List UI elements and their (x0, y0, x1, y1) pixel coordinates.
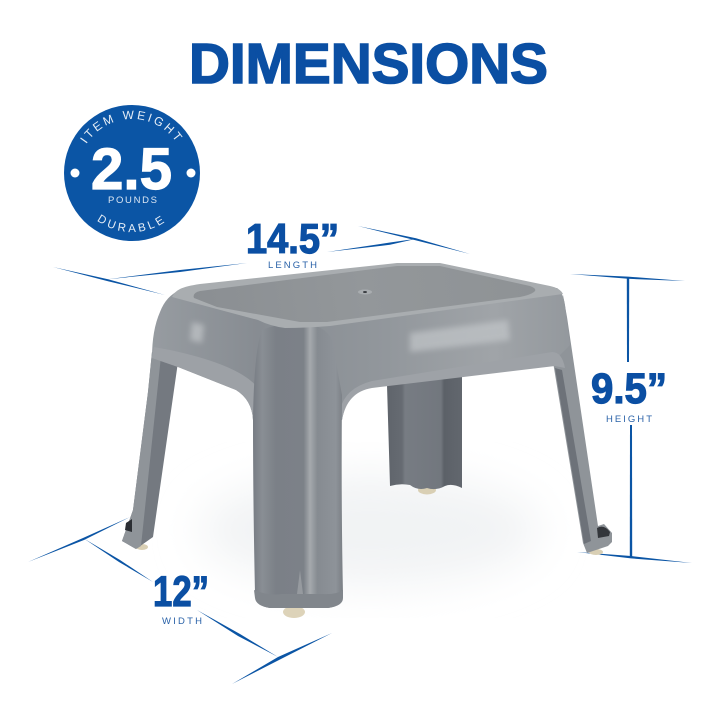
back leg (387, 375, 462, 494)
height label: HEIGHT (606, 414, 652, 425)
seat rim (172, 263, 563, 328)
badge: item weight (64, 105, 200, 241)
front leg notch (297, 570, 303, 594)
title: DIMENSIONS (189, 32, 548, 96)
step stool (122, 263, 612, 618)
apron lower lip (152, 347, 258, 420)
badge dots (70, 168, 196, 178)
height value: 9.5” (591, 365, 667, 413)
front foot (283, 606, 305, 618)
seat apron (152, 288, 570, 420)
badge value: 2.5 (91, 137, 172, 202)
width label: WIDTH (162, 616, 202, 627)
badge unit: POUNDS (108, 195, 157, 206)
apron lower lip right (340, 352, 565, 420)
length label: LENGTH (268, 260, 317, 271)
front foot rim (254, 590, 343, 608)
height dimension lines (570, 274, 692, 563)
badge label: durable: DURABLE (98, 214, 164, 232)
apron highlights (190, 320, 510, 352)
seat centre hole (358, 290, 372, 294)
front leg (253, 324, 343, 608)
badge label: item weight: ITEM WEIGHT (80, 110, 183, 144)
width dimension lines (28, 517, 332, 684)
right leg (553, 295, 612, 555)
seat mat (194, 266, 535, 322)
seat top (172, 263, 563, 328)
length dimension lines (53, 226, 470, 295)
width value: 12” (153, 568, 209, 616)
floor shadow (200, 475, 540, 585)
left leg (122, 352, 178, 550)
length value: 14.5” (246, 215, 339, 262)
